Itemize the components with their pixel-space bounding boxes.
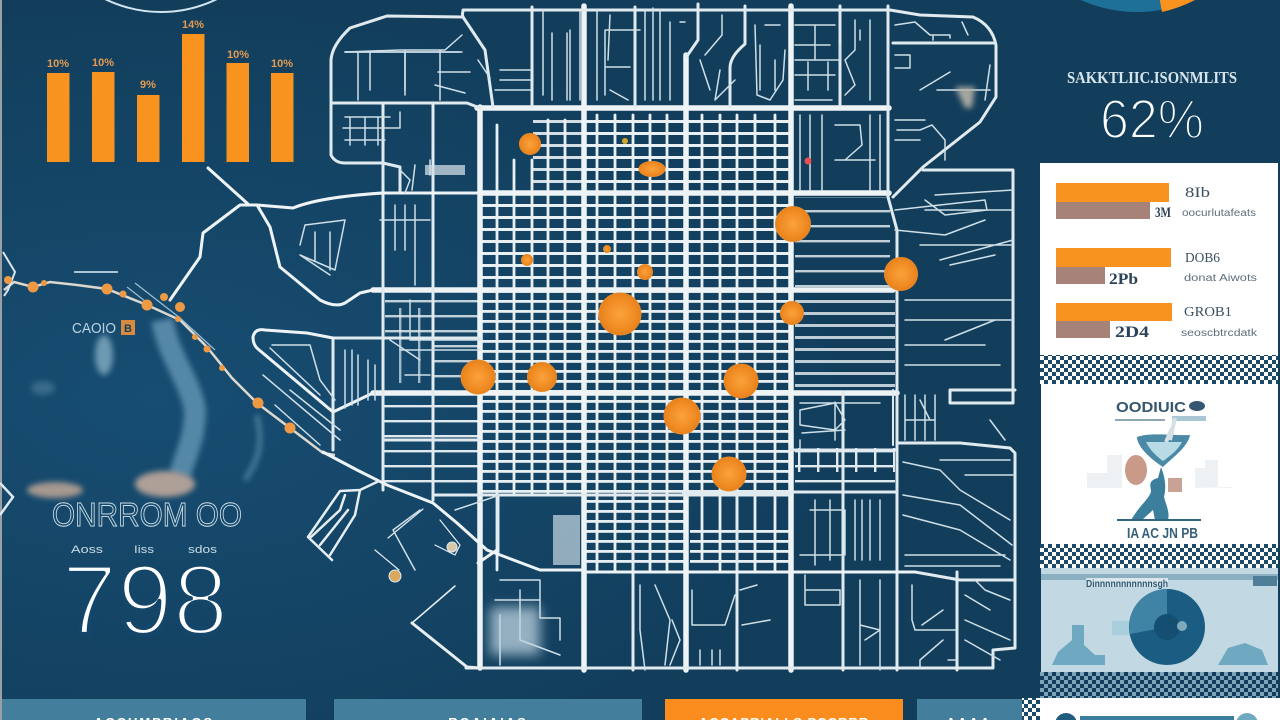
- bar labels: 10%: [271, 58, 293, 70]
- panel: pie illustration: [1041, 568, 1278, 672]
- bottom nav button 3: [665, 699, 903, 720]
- checker divider: [1040, 672, 1278, 698]
- row 2: DOB6: [1185, 251, 1220, 266]
- row 3: seoscbtrcdatk: [1181, 328, 1258, 339]
- figure: [1125, 455, 1147, 485]
- dense street grid columns: [497, 115, 775, 670]
- west approach roads: [170, 168, 915, 572]
- south-east district boundary: [892, 390, 894, 445]
- checker divider: [1040, 544, 1278, 568]
- right statistic value: 62%: [1100, 88, 1204, 150]
- row 1: 3M: [1155, 205, 1171, 221]
- statistic sub labels: Iiss: [134, 544, 155, 556]
- map hotspot markers: [389, 134, 918, 582]
- illustration caption: IA AC JN PB: [1127, 525, 1198, 542]
- bar labels: 10%: [92, 57, 114, 69]
- north-west district: [331, 11, 493, 192]
- bar labels: 10%: [227, 49, 249, 61]
- statistic sub labels: Aoss: [71, 544, 104, 556]
- medium streets: [333, 4, 1015, 670]
- illustration title: OODIUIC: [1116, 399, 1186, 416]
- south-west peninsula: [308, 481, 480, 668]
- pale city block patches: [425, 87, 975, 655]
- bottom nav button 2: [334, 699, 642, 720]
- top right pie fragment: [1000, 0, 1274, 12]
- row 2: 2Pb: [1109, 271, 1138, 288]
- statistic value: 798: [62, 544, 228, 655]
- pie panel header: [1086, 578, 1168, 587]
- major avenues: [373, 6, 897, 670]
- row 2: donat Aiwots: [1184, 273, 1257, 284]
- statistic sub labels: [71, 544, 218, 556]
- row 2: [1056, 248, 1257, 288]
- bottom nav button 4: [917, 699, 1022, 720]
- left statistic: [52, 496, 242, 655]
- glass: [1137, 434, 1190, 467]
- bar labels: 9%: [140, 79, 156, 91]
- row 3: [1056, 303, 1258, 341]
- row 1: 8Ib: [1185, 185, 1210, 201]
- right statistic: [1067, 68, 1237, 150]
- coastal route with markers: [3, 252, 335, 455]
- thin detail streets: [263, 8, 1015, 670]
- faint buildings: [1087, 455, 1232, 488]
- statistic heading: ONRROM OO: [52, 496, 242, 533]
- right statistic heading: SAKKTLIIC.ISONMLITS: [1067, 68, 1237, 87]
- pie chart: [1129, 589, 1205, 665]
- checker divider: [1022, 698, 1040, 720]
- row 1: [1056, 183, 1256, 221]
- bar labels: [47, 19, 293, 91]
- bars: [47, 34, 294, 162]
- bottom nav button 1: [2, 699, 306, 720]
- bar labels: 14%: [182, 19, 204, 31]
- statistic sub labels: sdos: [188, 544, 218, 556]
- street map: [170, 4, 1015, 670]
- left edge diamond marker: [0, 483, 13, 515]
- map label: CAOIO: [72, 320, 116, 337]
- checker divider: [1040, 355, 1278, 384]
- dense street grid rows: [383, 115, 895, 570]
- panel: illustration: [1041, 384, 1278, 544]
- panel: pie illustration: Dinnnnnnnnnnnsgh: [1086, 579, 1168, 590]
- map label: B: [124, 323, 132, 335]
- panel: bottom right legend: [1040, 698, 1280, 720]
- row 1: oocurlutafeats: [1182, 208, 1256, 219]
- panel: comparison bars: [1040, 163, 1278, 355]
- row 3: 2D4: [1115, 324, 1149, 341]
- bar labels: 10%: [47, 58, 69, 70]
- bar chart: [47, 19, 294, 162]
- watery glow patches: [27, 320, 260, 498]
- hills: [1052, 625, 1105, 665]
- arc at top left: [34, 0, 288, 12]
- row 3: GROB1: [1184, 305, 1232, 320]
